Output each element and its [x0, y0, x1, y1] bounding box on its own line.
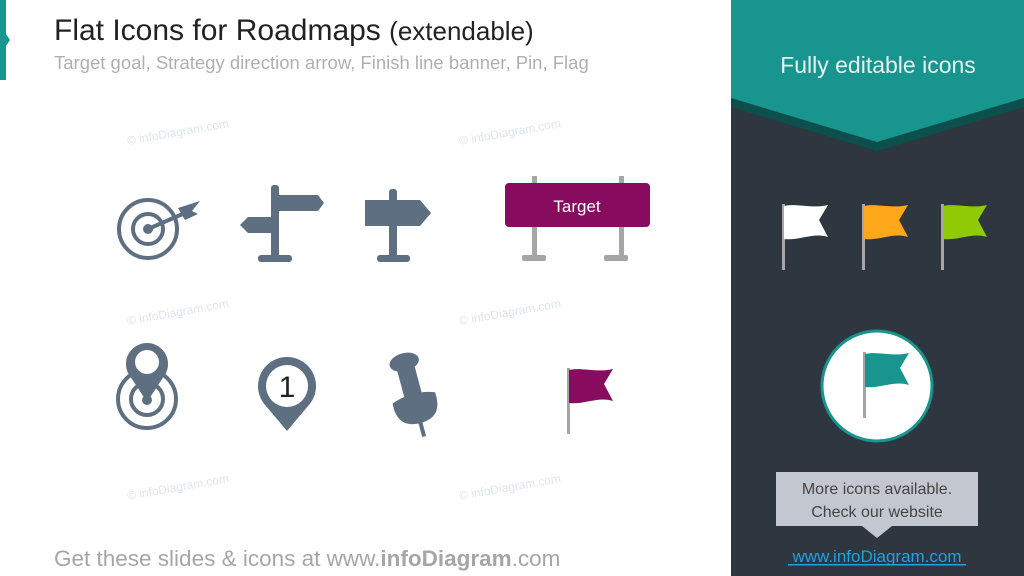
title marker — [0, 0, 10, 80]
icon: target banner — [505, 176, 650, 261]
callout: More icons available. — [802, 481, 952, 498]
icon: target banner: Target — [553, 197, 601, 216]
icon: circle flag — [822, 331, 932, 441]
subtitle: Target goal, Strategy direction arrow, Finish line banner, Pin, Flag — [54, 52, 589, 73]
watermarks: © infoDiagram.com — [458, 116, 562, 148]
icon: numbered pin — [258, 357, 316, 431]
panel: right dark — [731, 0, 1024, 576]
icon: target with arrow — [119, 200, 200, 258]
title: Flat Icons for Roadmaps (extendable) — [54, 14, 534, 47]
watermarks — [126, 116, 562, 503]
icon: signpost one direction — [365, 189, 431, 262]
footer: Get these slides & icons at www.infoDiagram.com — [54, 546, 560, 571]
icon: pushpin — [380, 348, 446, 442]
watermarks: © infoDiagram.com — [458, 471, 562, 503]
icon: numbered pin: 1 — [279, 371, 295, 404]
icon: location pin target — [118, 343, 176, 428]
callout — [776, 472, 978, 538]
icon: three flags — [782, 204, 987, 270]
icon: signpost two directions — [240, 185, 324, 262]
link: www.infoDiagram.com — [791, 547, 962, 566]
callout: Check our website — [811, 504, 943, 521]
watermarks: © infoDiagram.com — [126, 116, 230, 148]
watermarks: © infoDiagram.com — [126, 296, 230, 328]
watermarks: © infoDiagram.com — [126, 471, 230, 503]
icon: purple flag — [567, 368, 613, 434]
heading: fully editable: Fully editable icons — [780, 52, 976, 78]
watermarks: © infoDiagram.com — [458, 296, 562, 328]
